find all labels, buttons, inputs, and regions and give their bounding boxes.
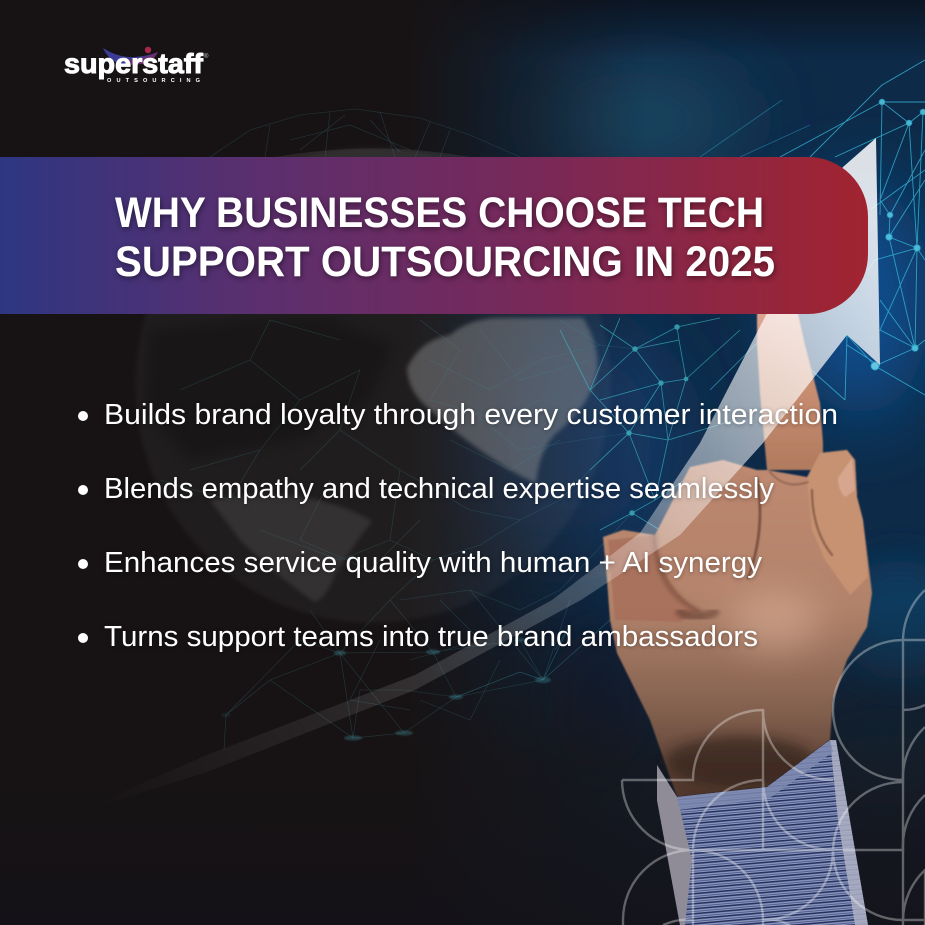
geometric outline pattern bbox=[622, 590, 925, 925]
bullet 1: Builds brand loyalty through every customer interaction bbox=[104, 399, 838, 431]
logo: registered mark: ® bbox=[204, 53, 209, 60]
network node glows bbox=[221, 638, 551, 740]
logo: tagline: OUTSOURCING bbox=[107, 78, 200, 84]
logo: wordmark: superstaff bbox=[64, 48, 204, 79]
hand: knuckle shadows bbox=[655, 472, 832, 617]
title text: SUPPORT OUTSOURCING IN 2025 bbox=[115, 238, 775, 286]
logo: superstaff outsourcing bbox=[64, 47, 209, 84]
bullet 4: Turns support teams into true brand ambassadors bbox=[104, 621, 758, 653]
network lines lower bbox=[456, 620, 610, 697]
hand: thumb nail bbox=[838, 458, 855, 497]
logo: dot bbox=[145, 47, 151, 53]
hand: palm and fist bbox=[603, 450, 872, 797]
bullet list bbox=[78, 399, 838, 653]
title text: WHY BUSINESSES CHOOSE TECH bbox=[115, 189, 764, 237]
network lines left of finger bbox=[560, 318, 760, 530]
logo: swoosh bbox=[103, 48, 158, 65]
bullet 2: Blends empathy and technical expertise seamlessly bbox=[104, 473, 775, 505]
title banner bbox=[0, 157, 868, 314]
network lines on globe bbox=[160, 109, 661, 750]
hand: fist fingers bbox=[655, 462, 760, 600]
shirt cuff bbox=[657, 740, 868, 925]
globe with continents bbox=[135, 147, 611, 623]
network lines top right bbox=[700, 60, 925, 400]
hand: index finger bbox=[757, 300, 823, 470]
title text bbox=[115, 189, 775, 286]
hand pointing upward bbox=[603, 300, 872, 797]
rising arrow bbox=[70, 138, 880, 815]
hand: thumb bbox=[807, 450, 868, 595]
bullet 3: Enhances service quality with human + AI synergy bbox=[104, 547, 763, 579]
